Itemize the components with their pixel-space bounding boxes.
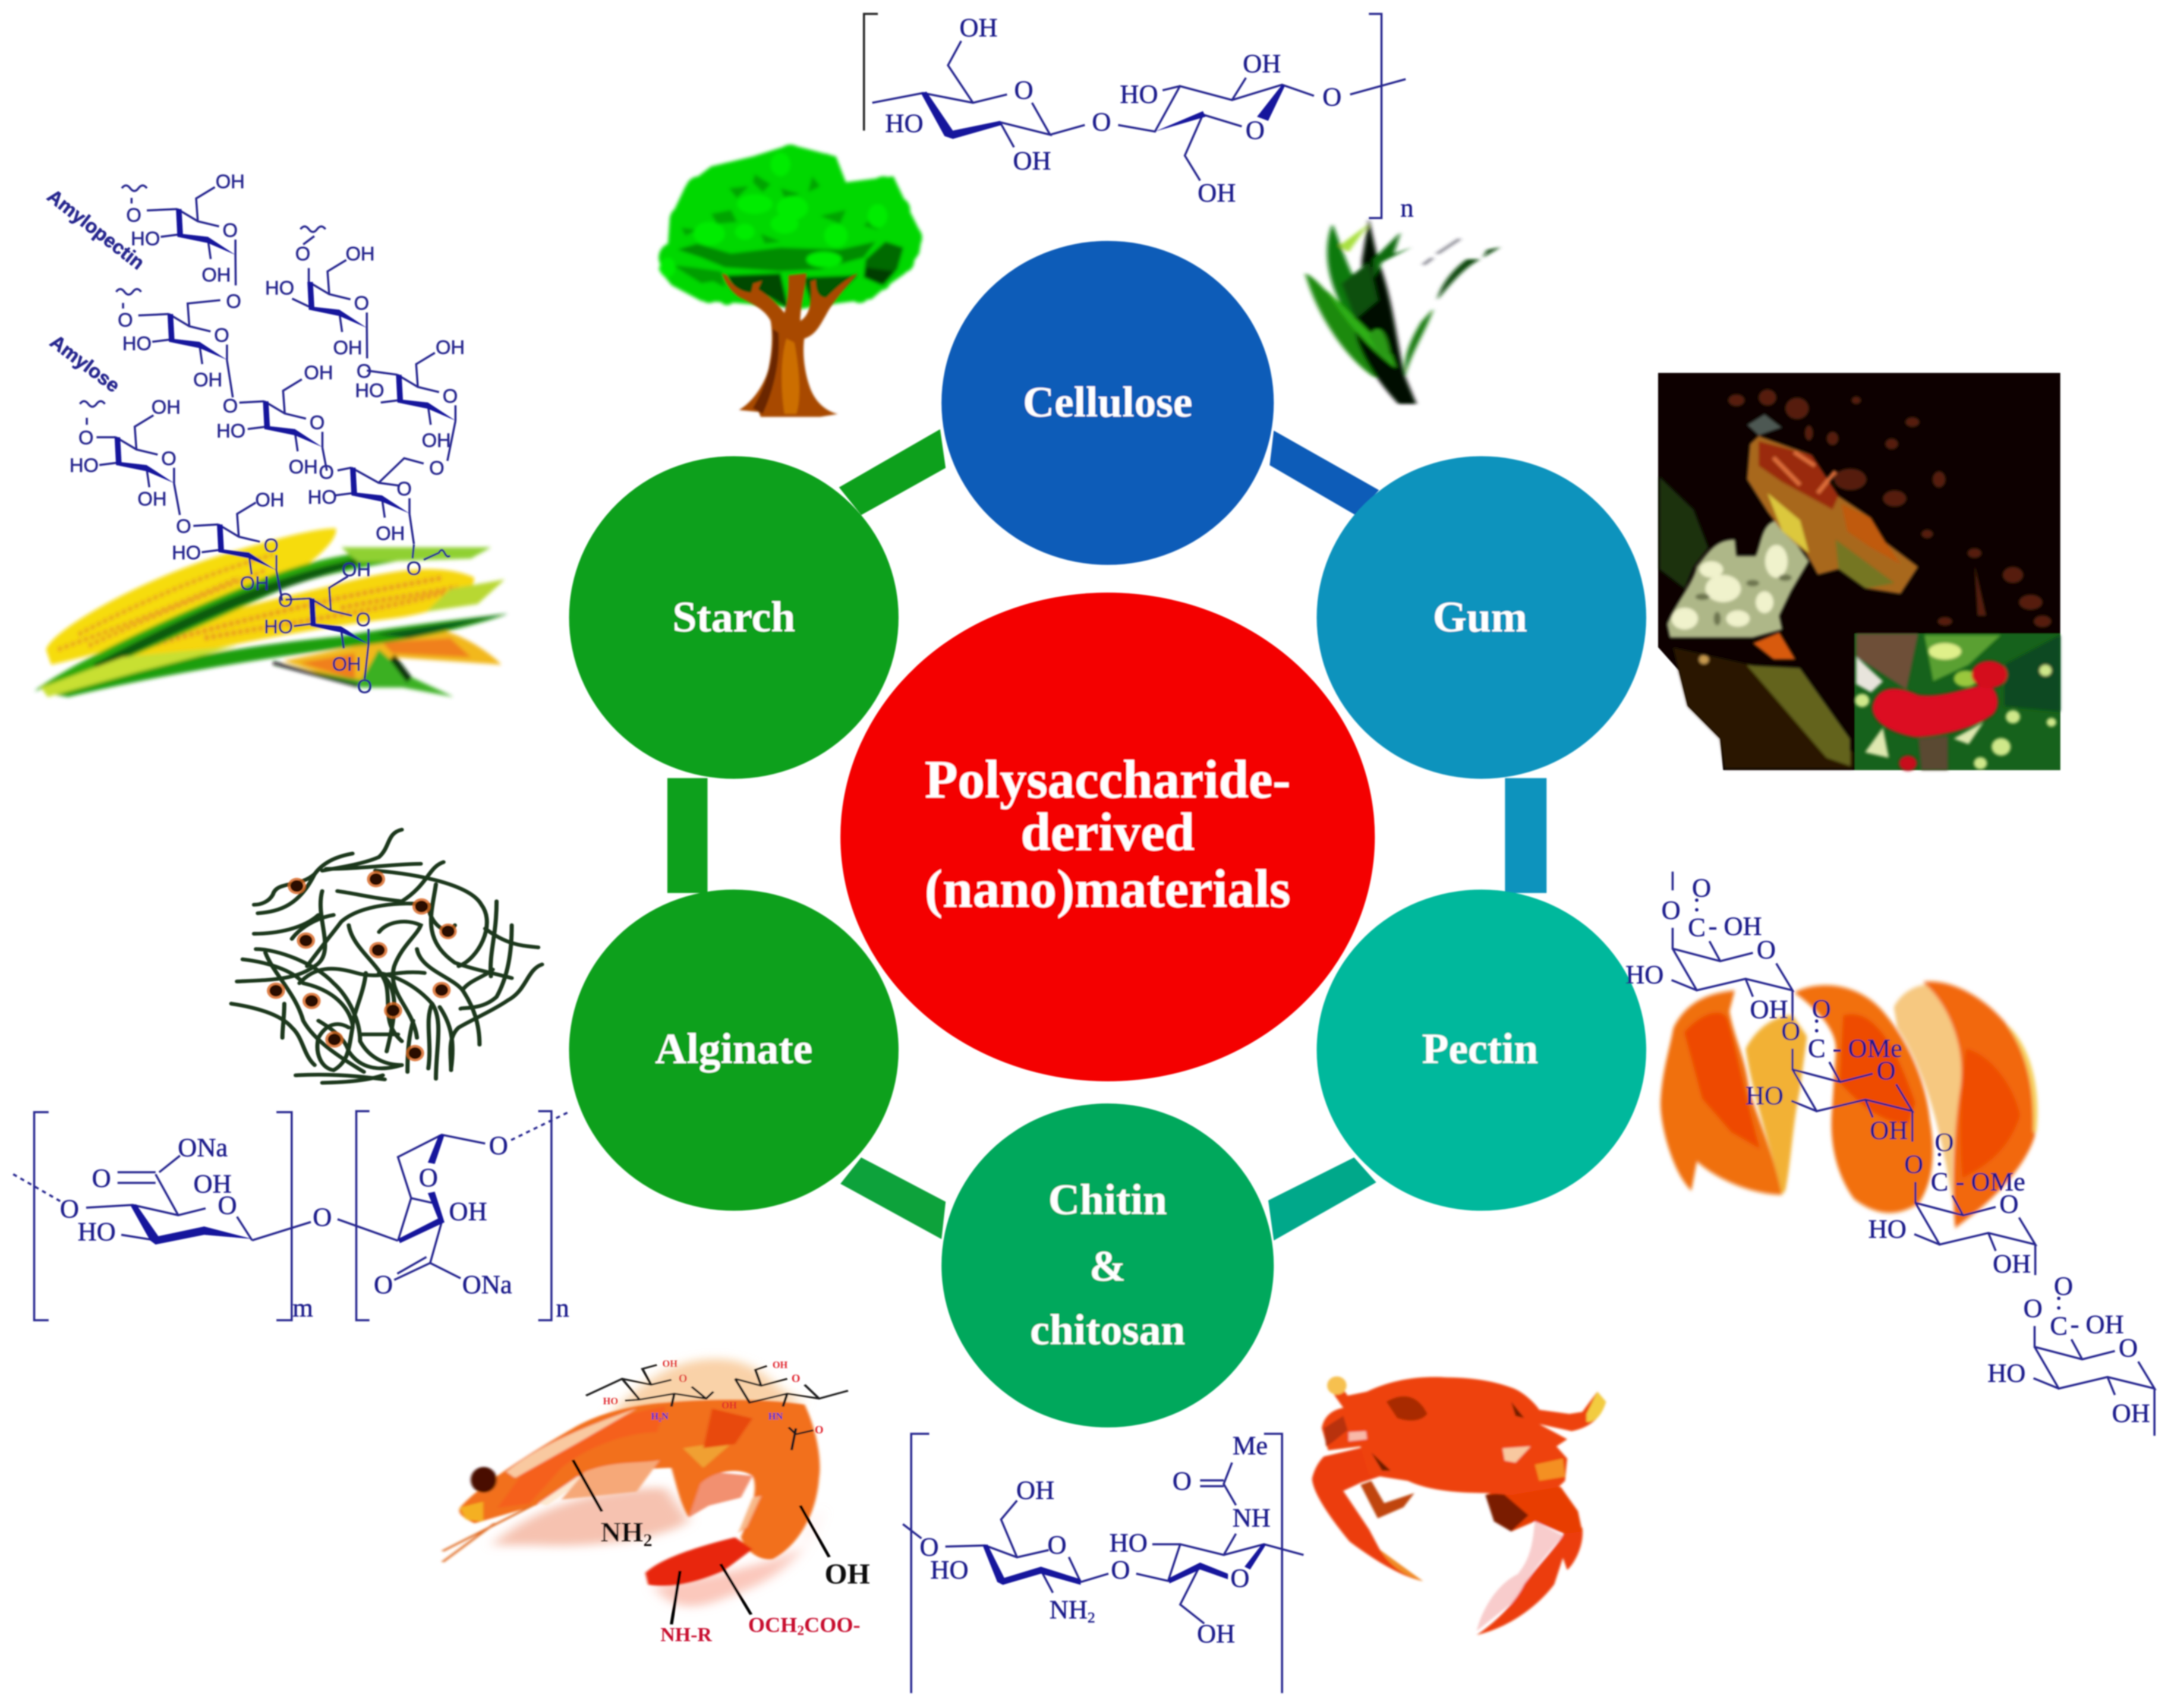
sugar unit 7: O (161, 447, 177, 469)
sugar unit 4: OH (422, 429, 451, 451)
sugar unit 1: O (223, 219, 238, 241)
sugar unit 3 (265, 226, 375, 358)
sugar unit 1: HO (131, 228, 160, 250)
sugar unit 4: HO (355, 379, 384, 401)
node: starch (569, 456, 899, 779)
sugar unit 9: HO (264, 615, 293, 637)
sugar unit 2: O (118, 308, 133, 330)
chitosan labels: COO- (804, 1613, 861, 1637)
chitin structure: HO (1110, 1528, 1148, 1558)
sugar unit 4 (355, 336, 465, 461)
cellulose structure: HO (885, 108, 924, 138)
sugar unit 5: HO (216, 420, 245, 442)
pectin unit 1: : (1693, 887, 1700, 917)
illustration: orange peels (1660, 982, 2037, 1228)
pectin unit 1: O (1757, 935, 1776, 965)
pectin unit 2: - OMe (1833, 1033, 1902, 1063)
chitosan labels: OH (773, 1359, 788, 1370)
pectin unit 4: O (2119, 1333, 2138, 1363)
pectin unit 1: - OH (1709, 911, 1762, 941)
chitosan labels: NH-R (660, 1624, 712, 1646)
alginate structure: OH (449, 1196, 487, 1226)
connector: cellulose to gum (1269, 431, 1379, 515)
sugar unit 7: OH (137, 487, 166, 509)
alginate structure: m (292, 1293, 313, 1323)
sugar unit 3: O (295, 242, 310, 264)
pectin unit 4: C (2050, 1310, 2068, 1340)
sugar unit 5 (216, 361, 333, 478)
starch structure (43, 171, 465, 697)
node: chitin and chitosan: chitosan (1030, 1306, 1185, 1354)
connector: chitin to alginate (840, 1158, 946, 1239)
sugar unit 9: O (355, 609, 371, 631)
node: alginate: Alginate (655, 1025, 812, 1073)
chitosan labels: 2 (643, 1530, 653, 1550)
chitosan labels: OCH (748, 1613, 797, 1637)
pectin unit 2: O (1812, 994, 1831, 1023)
sugar unit 3: OH (333, 336, 363, 358)
icon: seaweed (1305, 218, 1501, 404)
pectin unit 2 (1745, 994, 1912, 1145)
chitosan labels (601, 1358, 870, 1646)
chitosan labels: OH (721, 1400, 737, 1411)
node: pectin: Pectin (1422, 1025, 1538, 1073)
sugar unit 4: O (357, 360, 371, 382)
central node (840, 593, 1375, 1081)
connector: gum to pectin (1505, 778, 1546, 893)
cellulose structure: n (1400, 193, 1414, 223)
sugar unit 3: OH (345, 242, 375, 264)
cellulose structure (864, 12, 1414, 223)
illustration: shrimp (443, 1359, 848, 1624)
sugar unit 6: O (429, 457, 445, 479)
node: pectin (1317, 890, 1646, 1211)
chitin structure: O (1048, 1530, 1067, 1559)
pointer lines (573, 1460, 829, 1624)
pectin unit 4: O (2024, 1293, 2043, 1323)
sugar unit 8: OH (255, 489, 284, 510)
node: gum (1317, 456, 1646, 779)
node: cellulose: Cellulose (1023, 378, 1192, 426)
chitosan backbone bonds (586, 1365, 848, 1450)
alginate structure: O (419, 1162, 438, 1192)
alginate structure: O (374, 1269, 393, 1299)
alginate structure: HO (78, 1217, 116, 1246)
chitin structure: 2 (1088, 1609, 1095, 1626)
sugar unit 1: O (126, 204, 141, 226)
sugar unit 4: OH (436, 336, 465, 358)
alginate structure: ONa (462, 1269, 512, 1299)
sugar unit 9 (264, 558, 372, 697)
pectin structure (1625, 872, 2154, 1436)
chitin structure: NH (1233, 1503, 1271, 1533)
node: gum: Gum (1433, 593, 1527, 641)
sugar unit 2 (116, 289, 241, 398)
sugar unit 8 (172, 489, 284, 601)
pectin unit 3: - OMe (1956, 1167, 2025, 1196)
node: chitin and chitosan: Chitin (1048, 1176, 1167, 1224)
pectin unit 2: : (1813, 1009, 1820, 1038)
pectin unit 3: O (1999, 1189, 2019, 1218)
cellulose structure: O (1322, 82, 1341, 112)
chitin structure: NH (1050, 1594, 1088, 1624)
chitosan labels: HO (603, 1395, 618, 1407)
chitin structure: O (1230, 1563, 1249, 1593)
pectin unit 1 (1625, 872, 1792, 1024)
sugar unit 8: O (263, 534, 279, 556)
sugar unit 5: OH (304, 361, 333, 383)
sugar unit 7: O (78, 426, 93, 448)
chitosan labels: OH (824, 1557, 870, 1590)
pectin unit 2: O (1877, 1055, 1896, 1085)
pectin unit 2: HO (1745, 1080, 1784, 1110)
sugar unit 2: O (214, 324, 229, 346)
alginate structure: O (92, 1163, 111, 1193)
pectin unit 3: OH (1993, 1249, 2031, 1278)
chitosan labels: NH (601, 1517, 643, 1548)
chitosan labels: O (792, 1372, 800, 1385)
photo: gum exudate on tree bark (1658, 373, 2060, 771)
pectin unit 3: HO (1868, 1214, 1907, 1243)
sugar unit 6: OH (376, 522, 405, 544)
pectin unit 3: O (1904, 1149, 1923, 1179)
sugar unit 1 (122, 171, 245, 285)
chitin structure: OH (1016, 1475, 1054, 1505)
sugar unit 7: OH (152, 396, 181, 418)
node: cellulose (941, 241, 1274, 565)
pectin unit 4: O (2054, 1271, 2073, 1301)
sugar unit 7: HO (70, 454, 99, 476)
sugar unit 6 (308, 457, 445, 544)
node: alginate (569, 890, 899, 1211)
sugar unit 9: OH (342, 558, 371, 580)
pectin unit 3: C (1931, 1167, 1948, 1196)
label: Amylose: Amylose (46, 330, 124, 396)
node: chitin and chitosan (941, 1104, 1274, 1427)
alginate structure: O (313, 1202, 332, 1232)
sugar unit 6: HO (308, 486, 337, 508)
sugar unit 2: OH (193, 368, 222, 390)
central node: (nano)materials (925, 859, 1291, 919)
pectin unit 1: O (1662, 895, 1681, 925)
cellulose structure: OH (959, 12, 998, 42)
pectin unit 1: O (1692, 873, 1711, 903)
sugar unit 8: OH (240, 572, 269, 594)
sugar unit 5: O (310, 411, 324, 433)
pectin unit 2: O (1781, 1016, 1800, 1045)
chitin structure: O (920, 1532, 939, 1562)
sugar unit 1: OH (216, 171, 245, 193)
sugar unit 5: O (223, 395, 238, 417)
pectin unit 2: C (1808, 1033, 1826, 1063)
pectin unit 3 (1868, 1127, 2035, 1278)
pectin unit 2: OH (1870, 1115, 1908, 1145)
illustration: crab (1312, 1376, 1606, 1635)
cellulose structure: O (1246, 115, 1265, 145)
connector: pectin to chitin (1268, 1158, 1376, 1240)
alginate structure: O (489, 1130, 508, 1160)
pectin unit 4: OH (2112, 1398, 2150, 1428)
sugar unit 1: OH (201, 263, 231, 285)
inset photo: red fruit (1855, 634, 2060, 771)
alginate structure (13, 1111, 571, 1323)
label: Amylopectin: Amylopectin (43, 185, 149, 274)
alginate structure: O (218, 1190, 237, 1220)
sugar unit 8: HO (172, 541, 201, 563)
alginate structure: ONa (178, 1133, 228, 1162)
sugar unit 5: OH (289, 456, 318, 478)
cellulose structure: O (1014, 75, 1033, 105)
chitin structure: O (1111, 1555, 1130, 1584)
sugar unit 7 (70, 396, 181, 515)
sugar unit 9: O (278, 589, 293, 611)
pectin unit 1: HO (1625, 960, 1663, 989)
terminal oxygen (407, 544, 450, 579)
sugar unit 3: HO (265, 276, 294, 298)
chitin structure: HO (930, 1555, 969, 1584)
chitosan labels: HN (768, 1411, 783, 1422)
central node: derived (1020, 802, 1195, 862)
pectin unit 4: HO (1987, 1358, 2025, 1388)
sugar unit 2: O (226, 290, 241, 312)
sugar unit 6: O (319, 461, 334, 483)
pectin unit 1: OH (1750, 994, 1788, 1024)
pectin unit 4: - OH (2071, 1309, 2124, 1339)
alginate structure: OH (194, 1168, 232, 1198)
connector: alginate to starch (667, 778, 707, 893)
pectin unit 1: C (1688, 912, 1706, 942)
chitin structure (903, 1430, 1303, 1693)
chitin structure: OH (1197, 1619, 1235, 1649)
chitosan labels: O (815, 1424, 824, 1436)
alginate structure: O (60, 1194, 79, 1224)
chitosan labels: H₂N (651, 1411, 669, 1422)
pectin unit 4 (1987, 1271, 2154, 1436)
sugar unit 9: OH (332, 653, 361, 675)
cellulose structure: OH (1198, 178, 1236, 207)
chitin structure: O (1173, 1466, 1192, 1496)
terminal oxygen: O (407, 557, 421, 579)
icon: tree (658, 144, 922, 417)
chitosan labels: O (679, 1372, 687, 1385)
icon: polymer network with nanoparticles (231, 830, 542, 1083)
illustration: corn cobs (34, 528, 508, 697)
central node: Polysaccharide- (925, 749, 1291, 809)
sugar unit 2: HO (122, 332, 152, 354)
cellulose structure: OH (1013, 146, 1051, 175)
pectin unit 3: : (1936, 1142, 1943, 1171)
sugar unit 3: O (354, 292, 369, 314)
hub-and-spoke diagram (569, 241, 1646, 1427)
alginate structure: n (556, 1293, 569, 1323)
cellulose structure: O (1092, 107, 1111, 137)
sugar unit 6: O (396, 478, 412, 500)
cellulose structure: HO (1120, 79, 1158, 109)
sugar unit 8: O (176, 515, 191, 537)
cellulose structure: OH (1243, 49, 1281, 78)
sugar unit 4: O (443, 385, 458, 406)
pectin unit 3: O (1935, 1127, 1954, 1156)
node: starch: Starch (672, 593, 795, 641)
pectin unit 4: : (2055, 1285, 2062, 1315)
chitosan labels: OH (662, 1358, 678, 1369)
chitin structure: Me (1233, 1430, 1268, 1460)
node: chitin and chitosan: & (1089, 1242, 1126, 1290)
connector: starch to cellulose (839, 429, 946, 515)
sugar unit 9: O (357, 675, 372, 697)
chitosan labels: 2 (797, 1623, 804, 1638)
